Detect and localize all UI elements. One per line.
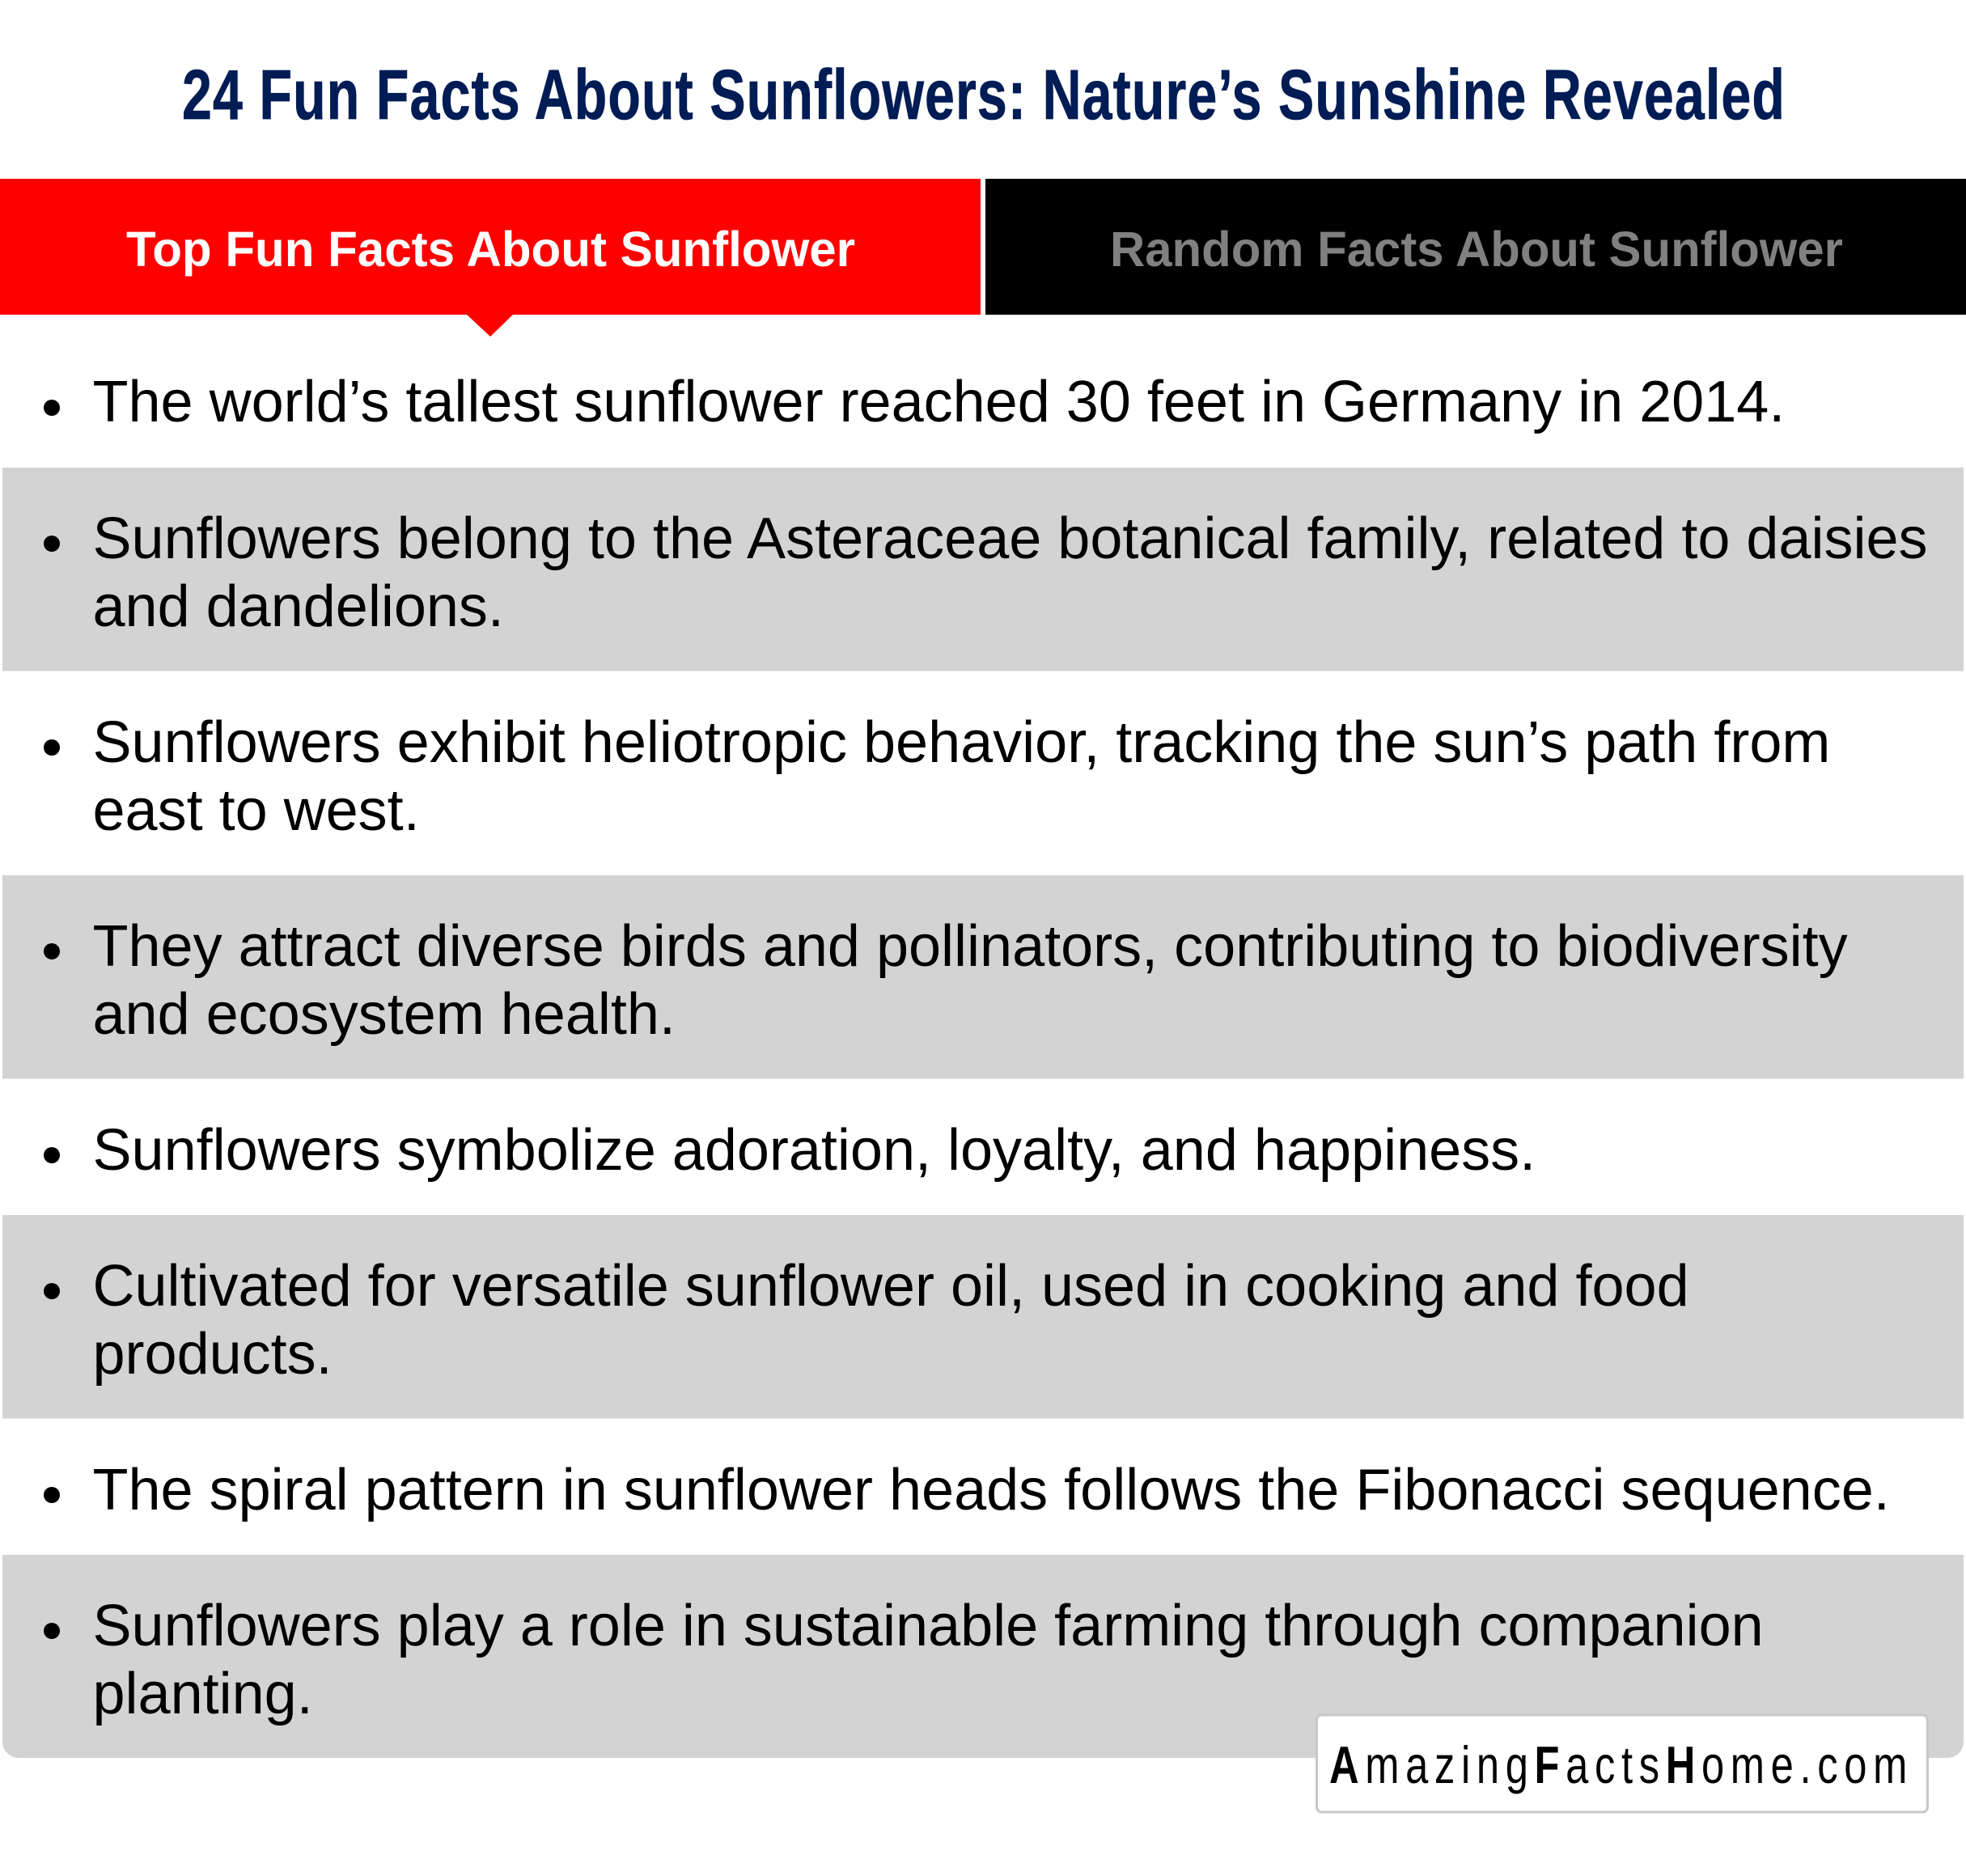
tab: top fun facts (active) xyxy=(0,179,981,337)
fact row 6: Cultivated for versatile sunflower oil, used in cooking and food xyxy=(92,1254,1689,1319)
fact row 3 xyxy=(44,710,1830,843)
tab: top fun facts (active): Top Fun Facts About Sunflower xyxy=(126,222,855,277)
watermark badge: AmazingFactsHome.com xyxy=(1329,1736,1913,1794)
tab: random facts (inactive) xyxy=(985,179,1966,315)
fact row 4: They attract diverse birds and pollinators, contributing to biodiversity xyxy=(92,914,1848,979)
fact row 8: planting. xyxy=(92,1662,313,1726)
fact row 5: Sunflowers symbolize adoration, loyalty, and happiness. xyxy=(92,1118,1536,1183)
fact row 3: Sunflowers exhibit heliotropic behavior, tracking the sun’s path from xyxy=(92,710,1830,775)
fact row 8: Sunflowers play a role in sustainable farming through companion xyxy=(92,1594,1764,1658)
fact row 4: and ecosystem health. xyxy=(92,982,676,1047)
fact row 2 xyxy=(2,468,1964,671)
fact row 2: Sunflowers belong to the Asteraceae botanical family, related to daisies xyxy=(92,506,1927,571)
fact row 1: The world’s tallest sunflower reached 30 feet in Germany in 2014. xyxy=(92,370,1785,434)
fact row 8 xyxy=(2,1555,1964,1758)
fact row 3: east to west. xyxy=(92,778,420,843)
fact row 7: The spiral pattern in sunflower heads follows the Fibonacci sequence. xyxy=(92,1458,1890,1522)
tab: random facts (inactive): Random Facts About Sunflower xyxy=(1110,222,1843,277)
fact row 2: and dandelions. xyxy=(92,574,504,639)
watermark badge xyxy=(1317,1715,1927,1812)
fact row 4 xyxy=(2,875,1964,1079)
fact row 6 xyxy=(2,1215,1964,1419)
fact row 6: products. xyxy=(92,1322,333,1387)
